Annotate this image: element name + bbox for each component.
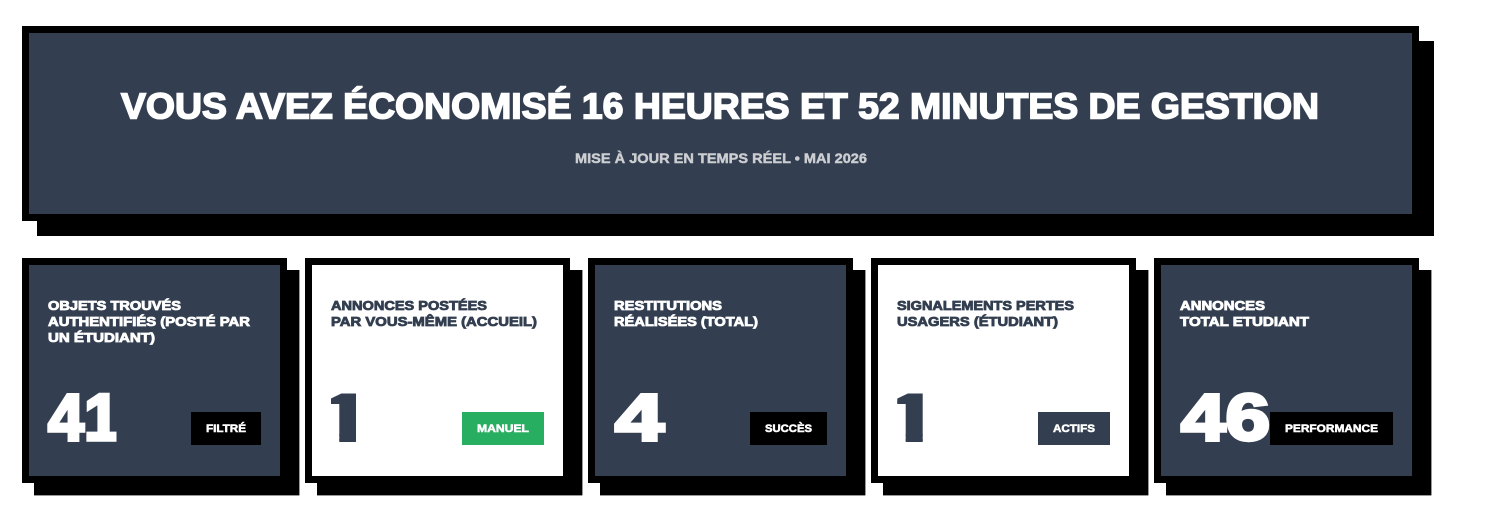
tag: actifs: [1038, 412, 1110, 445]
tag: performance: PERFORMANCE: [1285, 423, 1378, 435]
big number: 4: [615, 380, 664, 454]
card label: [614, 298, 758, 329]
card label: [331, 298, 537, 329]
card label: UN ÉTUDIANT): [48, 330, 155, 345]
tag: succès: [750, 412, 827, 445]
tag: manuel: MANUEL: [477, 423, 529, 435]
panel: signalements pertes usagers: [871, 258, 1148, 495]
card label: [48, 298, 251, 345]
card label: [897, 298, 1074, 329]
card label: USAGERS (ÉTUDIANT): [897, 314, 1058, 329]
panel: objets trouvés authentifiés: [22, 258, 299, 495]
panel: annonces total étudiant: [1154, 258, 1431, 495]
card label: OBJETS TROUVÉS: [48, 298, 181, 313]
big number: 41: [48, 380, 120, 454]
subtitle: MISE À JOUR EN TEMPS RÉEL • MAI 2026: [575, 150, 867, 166]
tag: filtré: [191, 412, 261, 445]
tag: succès: SUCCÈS: [765, 422, 812, 435]
title: VOUS AVEZ ÉCONOMISÉ 16 HEURES ET 52 MINUTES DE GESTION: [121, 86, 1319, 126]
card label: PAR VOUS-MÊME (ACCUEIL): [331, 314, 537, 329]
panel: restitutions réalisées: [588, 258, 865, 495]
card label: ANNONCES: [1180, 298, 1265, 313]
tag: actifs: ACTIFS: [1053, 423, 1095, 435]
card label: [1180, 298, 1309, 329]
tag: performance: [1270, 412, 1393, 445]
big number: 1: [320, 381, 370, 455]
card label: ANNONCES POSTÉES: [331, 298, 487, 313]
big number: 46: [1181, 380, 1270, 454]
big number: 1: [887, 381, 937, 455]
card label: AUTHENTIFIÉS (POSTÉ PAR: [48, 314, 251, 329]
card label: TOTAL ETUDIANT: [1180, 314, 1309, 329]
panel: annonces postées par vous-même: [305, 258, 582, 495]
card label: RESTITUTIONS: [614, 298, 722, 313]
card label: RÉALISÉES (TOTAL): [614, 314, 758, 329]
panel: header banner: [22, 26, 1434, 236]
card label: SIGNALEMENTS PERTES: [897, 298, 1074, 313]
tag: filtré: FILTRÉ: [206, 422, 246, 435]
tag: manuel: [462, 412, 544, 445]
